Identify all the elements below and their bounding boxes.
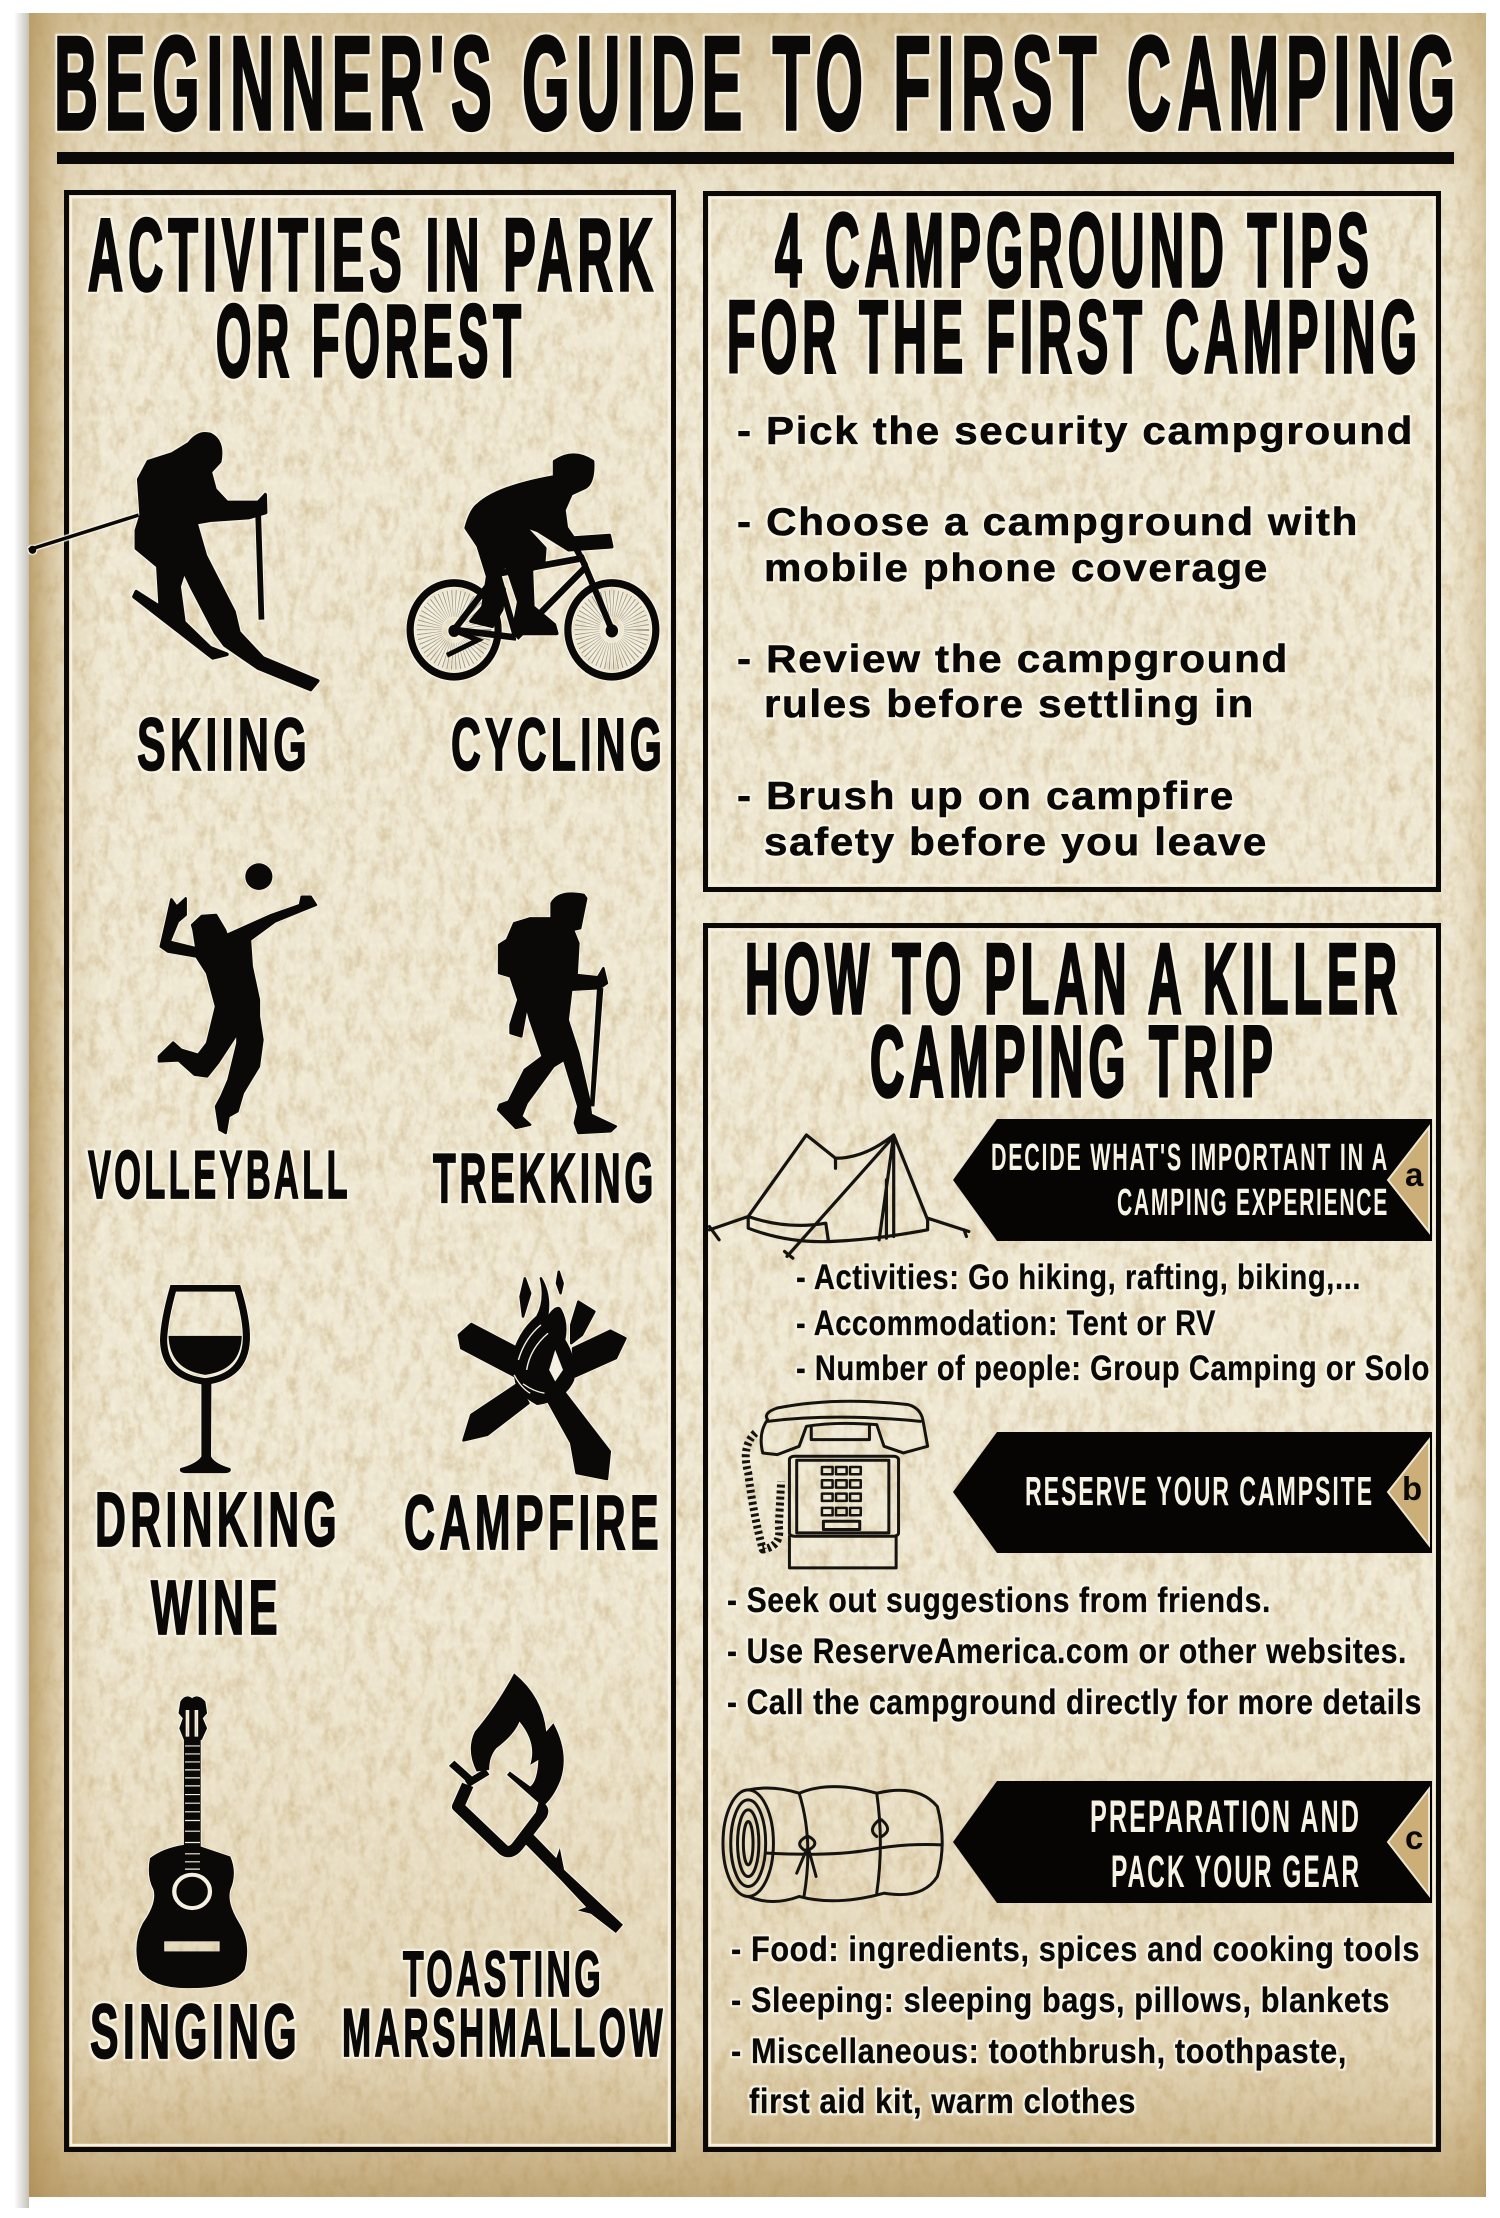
icon: wine glass	[164, 1288, 246, 1473]
icon: sleeping bag	[723, 1787, 942, 1901]
tips list: safety before you leave	[764, 821, 1268, 864]
list b: - Seek out suggestions from friends.	[727, 1581, 1271, 1620]
list a	[796, 1258, 1430, 1388]
tips list	[737, 410, 1414, 864]
icon: hiker with pole	[498, 894, 616, 1133]
panel frame: activities	[66, 192, 674, 2150]
tips list: - Pick the security campground	[737, 410, 1414, 453]
label: drinking wine	[95, 1477, 341, 1651]
list c	[731, 1930, 1420, 2121]
icon: toasting marshmallow	[452, 1673, 623, 1933]
drop shadow of the canvas	[14, 13, 29, 2208]
tips list: - Choose a campground with	[737, 501, 1359, 544]
tips list: - Review the campground	[737, 638, 1289, 681]
heading: activities: OR FOREST	[216, 284, 526, 398]
icon: telephone	[746, 1401, 928, 1568]
banner a	[953, 1119, 1432, 1241]
list a: - Activities: Go hiking, rafting, biking,...	[796, 1258, 1361, 1297]
label: skiing: SKIING	[137, 703, 311, 786]
tips list: rules before settling in	[764, 683, 1255, 726]
panel: activities in park or forest	[29, 192, 674, 2150]
banner c: c	[1405, 1819, 1423, 1856]
banner c	[953, 1781, 1432, 1903]
label: trekking: TREKKING	[433, 1139, 657, 1217]
banner a: a	[1405, 1156, 1424, 1193]
heading: tips	[727, 193, 1422, 394]
banner b: b	[1402, 1470, 1422, 1507]
infographic poster: ACTIVITIES IN PARK	[88, 198, 658, 312]
heading: activities	[88, 198, 658, 398]
label: cycling: CYCLING	[451, 703, 666, 786]
panel: plan a killer camping trip	[706, 923, 1438, 2150]
label: drinking wine: WINE	[151, 1565, 282, 1651]
icon: campfire	[459, 1272, 626, 1479]
list c: - Food: ingredients, spices and cooking tools	[731, 1930, 1420, 1969]
list c: - Miscellaneous: toothbrush, toothpaste,	[731, 2032, 1347, 2071]
label: toasting marshmallow	[342, 1938, 666, 2071]
panel frame: tips	[706, 194, 1438, 890]
list b	[727, 1581, 1422, 1722]
list a: - Accommodation: Tent or RV	[796, 1304, 1216, 1343]
icon: acoustic guitar	[136, 1696, 247, 1988]
panel frame: plan	[706, 926, 1438, 2150]
list c: - Sleeping: sleeping bags, pillows, blankets	[731, 1981, 1390, 2020]
icon: volleyball player	[159, 863, 316, 1133]
icon: tent	[709, 1135, 969, 1258]
tips list: mobile phone coverage	[764, 547, 1269, 590]
icon: skier	[29, 434, 318, 690]
icon: cyclist	[410, 455, 656, 677]
label: campfire: CAMPFIRE	[404, 1480, 663, 1566]
label: toasting marshmallow: TOASTING	[403, 1938, 604, 2010]
heading: plan	[745, 923, 1402, 1118]
list c: first aid kit, warm clothes	[749, 2082, 1136, 2121]
list b: - Use ReserveAmerica.com or other websites.	[727, 1632, 1407, 1671]
label: volleyball: VOLLEYBALL	[88, 1137, 351, 1213]
label: toasting marshmallow: MARSHMALLOW	[342, 1995, 666, 2071]
panel: campground tips	[706, 193, 1438, 890]
banner b	[953, 1432, 1432, 1553]
title rule	[57, 152, 1454, 164]
label: singing: SINGING	[90, 1989, 301, 2075]
label: drinking wine: DRINKING	[95, 1477, 341, 1563]
tips list: - Brush up on campfire	[737, 775, 1235, 818]
